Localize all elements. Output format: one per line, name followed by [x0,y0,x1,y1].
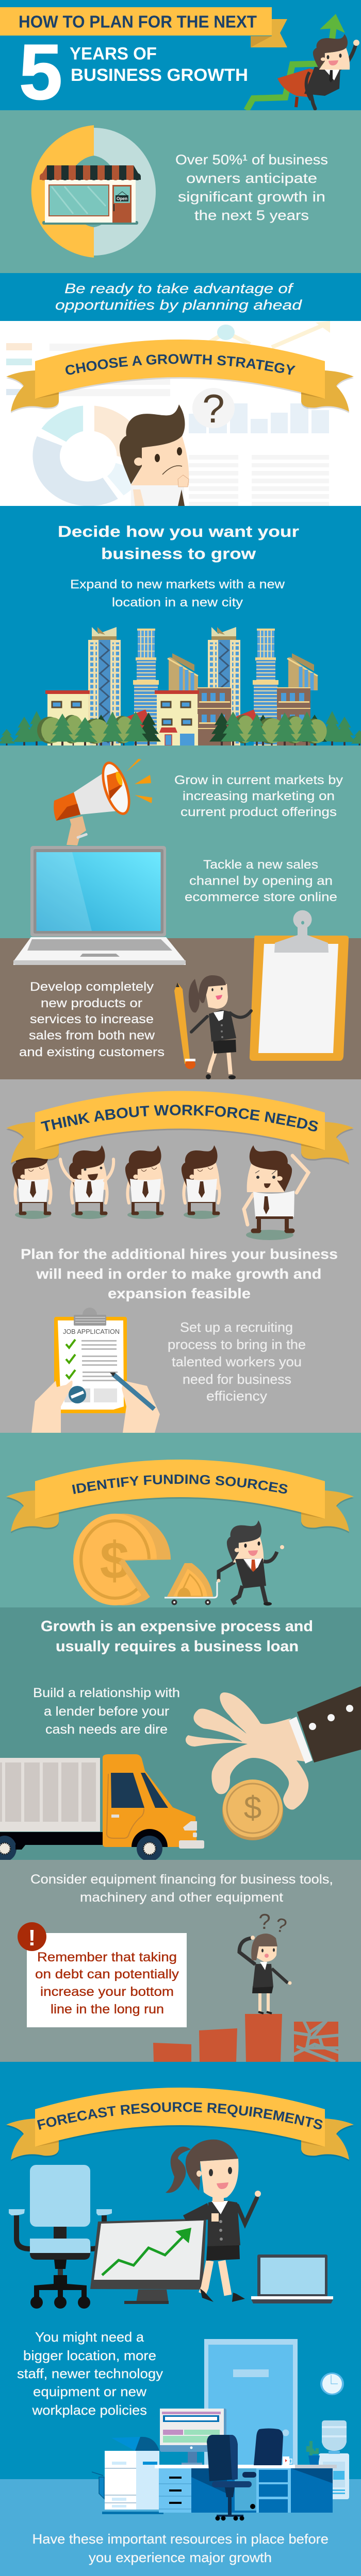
title ribbon: HOW TO PLAN FOR THE NEXT [19,12,257,31]
panel: choose a growth strategy [6,321,354,506]
panel: forecast resource requirements [0,2062,361,2479]
body text: current markets [174,773,343,819]
icon: hand holding coin: $ [244,1790,261,1826]
icon: confused businesswoman: ? [258,1909,271,1934]
heading ribbon: funding [6,1460,354,1533]
heading text: will need in order to make growth and [36,1266,322,1282]
heading text: business to grow [101,545,256,563]
italic message [55,281,302,313]
donut chart with storefront [31,125,156,258]
heading text: expansion feasible [108,1285,251,1301]
body text: recruiting: process to bring in the [168,1337,306,1352]
body text: what you might need: bigger location, more [23,2348,156,2363]
body text: new markets: location in a new city [112,596,243,609]
body text: equipment: Consider equipment financing for business tools, [30,1872,333,1887]
icon: exclamation badge: ! [28,1925,36,1951]
italic message: opportunities by planning ahead [55,297,302,313]
body text: resources in place: you experience major growth [89,2550,272,2565]
cactus [308,2441,320,2465]
italic message: Be ready to take advantage of [64,281,294,296]
heading text [58,522,299,563]
statistic text: significant growth in [178,189,325,205]
door [204,2339,298,2466]
water cooler [319,2420,349,2499]
body text: lender: Build a relationship with [33,1686,180,1700]
panel: identify funding sources [0,1433,361,1607]
subtitle: BUSINESS GROWTH [71,65,248,85]
icon: hand holding coin [186,1686,361,1840]
icon: megaphone [54,758,152,845]
illustration: city skyline [0,627,361,749]
body text: what you might need: workplace policies [31,2402,147,2418]
heading ribbon: choose a growth strategy: CHOOSE A GROWTH STRATEGY [65,354,296,375]
body text: lender: cash needs are dire [45,1722,168,1737]
icon: coin with slice removed [73,1514,171,1605]
panel: planning ahead banner [0,273,361,321]
body text: ecommerce [185,858,337,904]
body text: what you might need: staff, newer technology [17,2366,163,2381]
callout text: increase your bottom [40,1985,174,1999]
heading text: Growth is an expensive process and [41,1618,313,1635]
callout text [35,1950,179,2016]
heading text: Plan for the additional hires your business [21,1246,338,1262]
callout text: Remember that taking [37,1950,177,1964]
icon: businesswoman with pencil [174,975,251,1079]
icon: confused businesswoman [239,1909,292,2013]
heading ribbon: resources [6,2088,354,2161]
panel: equipment financing and debt [0,1860,361,2062]
callout: debt warning [18,1922,187,2027]
heading ribbon: funding: IDENTIFY FUNDING SOURCES [72,1475,288,1494]
worker 1 [12,1145,51,1219]
rear office chair [242,2429,283,2509]
body text: new products [19,980,165,1059]
panel: 50 percent statistic [0,110,361,273]
icon: businesswoman presenting [166,2140,261,2302]
body text: what you might need: You might need a [35,2329,144,2345]
subtitle [70,44,248,85]
body text: recruiting: efficiency [206,1388,267,1404]
body text: recruiting: Set up a recruiting [180,1319,293,1335]
panel: workforce needs [0,1079,361,1433]
panel: office floor [0,2339,361,2576]
icon: thinking businessman [120,404,189,506]
panel: decide how to grow [0,506,361,749]
body text: new products: and existing customers [19,1045,165,1059]
body text: what you might need: equipment or new [33,2384,146,2399]
statistic text: the next 5 years [194,208,309,223]
icon: job application clipboard: JOB APPLICATION [63,1328,120,1335]
body text: what you might need [17,2329,163,2418]
heading ribbon: resources: FORECAST RESOURCE REQUIREMENTS [37,2102,323,2130]
panel: hero header [0,0,361,116]
body text: lender [33,1686,180,1737]
printer [92,2437,163,2514]
heading text [21,1246,338,1301]
icon: confused businesswoman: ? [274,1914,288,1938]
icon: businessman pulling cart [217,1520,284,1605]
icon: monitor with growth chart [90,2218,206,2304]
body text: equipment [30,1872,333,1905]
icon: office chair [9,2165,112,2309]
body text: ecommerce: ecommerce store online [185,890,337,904]
heading ribbon: workforce: THINK ABOUT WORKFORCE NEEDS [40,1105,318,1131]
body text: recruiting: talented workers you [172,1354,302,1369]
icon: growth arrow [247,14,345,110]
worker 2 cheering [60,1145,113,1219]
icon: exclamation badge [18,1922,46,1951]
body text: recruiting [168,1319,306,1404]
worker 3 [125,1145,163,1219]
statistic text [175,152,328,223]
icon: delivery truck [0,1754,204,1861]
statistic text: Over 50%¹ of business [175,152,328,167]
body text: ecommerce: Tackle a new sales [203,858,318,872]
body text: resources in place [32,2531,329,2565]
desk [155,2465,337,2513]
heading ribbon: workforce [6,1091,354,1164]
body text: resources in place: Have these important resources in place before [32,2531,329,2547]
body text: equipment: machinery and other equipment [80,1890,283,1905]
worker 4 [182,1145,220,1219]
body text: current markets: Grow in current markets by [174,773,343,787]
big number 5: 5 [19,28,62,116]
panel: current markets and ecommerce [0,745,361,938]
illustration: office [92,2339,349,2520]
panel: new products [0,846,361,1079]
front office chair [207,2435,252,2520]
icon: clipboard [250,910,349,1061]
desktop monitor [160,2409,226,2465]
title ribbon [0,7,287,47]
callout text: line in the long run [51,2002,164,2016]
worker 5 worried [244,1145,308,1240]
subtitle: YEARS OF [70,44,157,63]
icon: job application clipboard [31,1308,160,1433]
heading ribbon: choose a growth strategy [6,340,354,413]
heading text: usually requires a business loan [56,1638,299,1655]
body text: lender: a lender before your [44,1704,169,1719]
icon: coin slice on cart [165,1563,217,1605]
icon: storefront: Open [117,196,127,201]
statistic text: owners anticipate [186,171,317,186]
hands [31,1372,160,1433]
wall clock [320,2372,344,2395]
trees [0,711,361,745]
faded chart background [6,321,330,506]
icon: question bubble: ? [202,386,225,431]
icon: small laptop [251,2255,333,2303]
icon: question bubble [192,386,235,431]
body text: recruiting: need for business [183,1371,291,1387]
body text: current markets: current product offerings [180,805,337,819]
icon: superhero businessman [277,34,359,109]
body text: new products: sales from both new [29,1028,155,1043]
mug [283,2456,292,2465]
icon: coin with slice removed: $ [100,1531,129,1590]
icon: row of workers [12,1145,308,1240]
body text: ecommerce: channel by opening an [189,874,333,888]
callout text: on debt can potentially [35,1967,179,1981]
panel: business loan and truck [0,1607,361,1861]
body text: new products: services to increase [30,1012,154,1026]
body text: new products: Develop completely [30,980,154,994]
body text: current markets: increasing marketing on [183,789,335,803]
body text: new markets: Expand to new markets with a new [70,578,285,591]
heading text [41,1618,313,1655]
icon: laptop [13,846,186,965]
body text: new products: new products or [41,996,142,1010]
body text: new markets [70,578,285,609]
heading text: Decide how you want your [58,522,299,540]
bar chart: rising and broken bars [153,2014,340,2062]
icon: storefront [40,165,141,225]
